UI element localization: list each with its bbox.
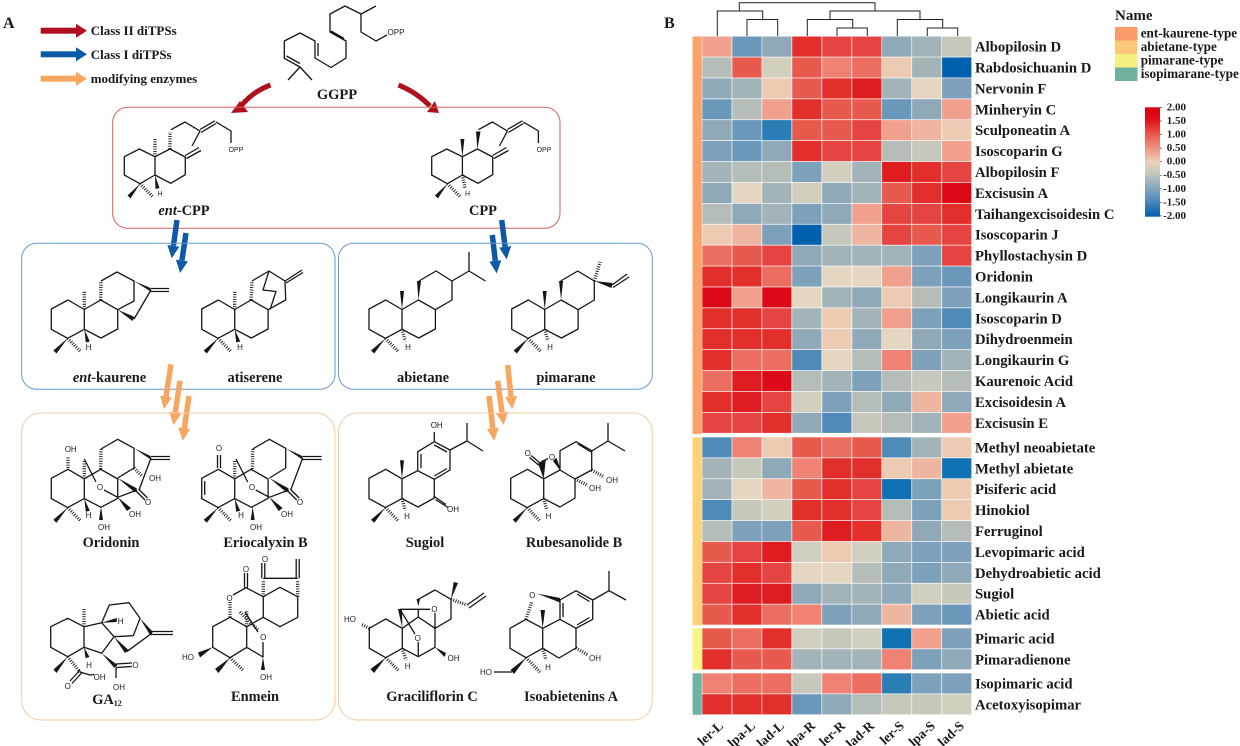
- panel: abietane/pimarane-derived products box: [338, 413, 652, 720]
- row labels: compound names: Dihydroenmein: [975, 332, 1073, 348]
- colour scale legend: -0.50: [1163, 169, 1186, 181]
- row labels: compound names: Phyllostachysin D: [975, 249, 1087, 265]
- panel letter A: A: [3, 15, 15, 32]
- molecule: Graciliflorin C: O: [431, 605, 438, 614]
- molecule: Oridonin: Oridonin: [83, 535, 139, 551]
- arrow: Class I diTPSs: Class I diTPSs: [91, 47, 172, 62]
- molecule: Eriocalyxin B: Eriocalyxin B: [223, 535, 308, 551]
- molecule: ent-CPP: OPP: [229, 147, 244, 154]
- molecule: Enmein: [182, 555, 299, 705]
- panel letter B: B: [664, 15, 675, 32]
- row labels: compound names: Methyl abietate: [975, 461, 1074, 477]
- molecule: Isoabietenins A: Isoabietenins A: [524, 689, 619, 705]
- molecule: Enmein: O: [226, 594, 233, 603]
- molecule: GA12: H: [118, 617, 124, 626]
- molecule: Rubesanolide B: [511, 423, 625, 551]
- colour scale legend: 1.50: [1167, 115, 1186, 127]
- row labels: compound names: Dehydroabietic acid: [975, 566, 1101, 582]
- legend: compound type: [1115, 8, 1239, 81]
- row labels: compound names: Sugiol: [975, 587, 1014, 603]
- molecule: Enmein: OH: [260, 673, 272, 682]
- molecule: Rubesanolide B: Rubesanolide B: [526, 535, 623, 551]
- row labels: compound names: Isoscoparin J: [975, 228, 1059, 244]
- molecule: Eriocalyxin B: H: [238, 511, 244, 520]
- molecule: Graciliflorin C: HO: [344, 615, 356, 624]
- molecule: Isoabietenins A: H: [545, 663, 551, 672]
- molecule: CPP: [432, 121, 552, 219]
- arrows: to oridonin-type products: [166, 364, 189, 428]
- molecule: GA12: OH: [113, 683, 125, 692]
- annotation bar: compound types: [692, 36, 702, 715]
- molecule: Graciliflorin C: OH: [448, 654, 460, 663]
- heatmap cells: pimarane-type: [702, 628, 971, 669]
- panel: abietane and pimarane box: [338, 243, 652, 389]
- molecule: Eriocalyxin B: O: [216, 444, 222, 453]
- molecule: CPP: OPP: [537, 147, 552, 154]
- colour scale legend: 0.00: [1167, 156, 1186, 168]
- molecule: GA12: GA: [92, 692, 114, 708]
- colour scale legend: -1.00: [1163, 183, 1186, 195]
- molecule: Graciliflorin C: [344, 582, 486, 705]
- row labels: compound names: Pimaradienone: [975, 652, 1071, 668]
- molecule: ent-kaurene: [51, 272, 169, 386]
- colour scale legend: [1145, 102, 1186, 222]
- molecule: Oridonin: OH: [129, 510, 141, 519]
- legend: compound type: ent-kaurene-type: [1141, 26, 1237, 40]
- legend: enzyme arrows: [41, 23, 197, 86]
- molecule: GGPP: GGPP: [317, 87, 357, 103]
- molecule: Sugiol: [369, 421, 483, 551]
- arrow: Class II diTPSs: [41, 23, 177, 38]
- legend: compound type: abietane-type: [1141, 39, 1217, 54]
- molecule: GA12: OH: [94, 673, 106, 682]
- molecule: Oridonin: OH: [98, 523, 110, 532]
- row labels: compound names: Nervonin F: [975, 81, 1046, 97]
- molecule: Oridonin: OH: [149, 474, 161, 483]
- row labels: compound names: Rabdosichuanin D: [975, 60, 1091, 76]
- row labels: compound names: Oridonin: [975, 270, 1033, 286]
- molecule: ent-CPP: [124, 121, 244, 219]
- row labels: compound names: Albopilosin F: [975, 165, 1060, 181]
- legend: compound type: pimarane-type: [1141, 52, 1224, 68]
- arrow: GGPP to CPP: [398, 85, 439, 113]
- molecule: Oridonin: H: [86, 511, 92, 520]
- colour scale legend: -1.50: [1163, 196, 1186, 208]
- row labels: compound names: Methyl neoabietate: [975, 440, 1096, 456]
- arrow: Class I diTPSs: [41, 47, 172, 62]
- panel: ent-kaurene and atiserene box: [22, 243, 335, 389]
- row labels: compound names: Pimaric acid: [975, 631, 1055, 647]
- molecule: ent-CPP: H: [157, 191, 163, 198]
- legend: compound type: isopimarane-type: [1141, 66, 1239, 81]
- row labels: compound names: Isoscoparin G: [975, 144, 1063, 160]
- molecule: GA12: [51, 603, 173, 708]
- row labels: compound names: Longikaurin A: [975, 290, 1068, 306]
- molecule: CPP: CPP: [469, 203, 497, 219]
- molecule: atiserene: atiserene: [228, 370, 283, 386]
- molecule: GA12: 12: [114, 699, 122, 708]
- molecule: atiserene: H: [237, 343, 243, 352]
- molecule: GGPP: OPP: [388, 28, 404, 37]
- arrows: CPP to ent-kaurene and atiserene: [173, 220, 186, 260]
- molecule: pimarane: [512, 262, 629, 386]
- row labels: compound names: Albopilosin D: [975, 40, 1061, 56]
- molecule: pimarane: pimarane: [536, 370, 596, 386]
- molecule: Graciliflorin C: O: [415, 634, 421, 643]
- molecule: ent-CPP: ent-CPP: [158, 203, 210, 219]
- molecule: Eriocalyxin B: O: [249, 483, 255, 492]
- legend: compound type: Name: [1115, 8, 1153, 24]
- molecule: Rubesanolide B: O: [525, 449, 531, 458]
- molecule: Rubesanolide B: OH: [606, 476, 618, 485]
- molecule: Sugiol: OH: [447, 505, 459, 514]
- molecule: Isoabietenins A: OH: [589, 654, 601, 663]
- molecule: pimarane: H: [547, 343, 553, 352]
- arrows: to sugiol-type products: [489, 365, 511, 428]
- molecule: abietane: [369, 252, 486, 386]
- row labels: compound names: [975, 40, 1114, 713]
- molecule: Isoabietenins A: [480, 571, 626, 705]
- molecule: Isoabietenins A: O: [529, 591, 535, 600]
- row labels: compound names: Pisiferic acid: [975, 482, 1056, 498]
- molecule: Eriocalyxin B: O: [297, 498, 303, 507]
- arrow: modifying enzymes: [41, 71, 197, 86]
- molecule: GA12: O: [65, 682, 71, 691]
- molecule: Enmein: O: [262, 555, 268, 564]
- row labels: compound names: Acetoxyisopimar: [975, 697, 1082, 713]
- molecule: abietane: H: [405, 343, 411, 352]
- molecule: Rubesanolide B: O: [549, 453, 555, 462]
- heatmap cells: abietane-type: [702, 437, 971, 625]
- panel: CPP box: [113, 107, 560, 228]
- row labels: compound names: Levopimaric acid: [975, 545, 1085, 561]
- row labels: compound names: Abietic acid: [975, 608, 1050, 624]
- row labels: compound names: Longikaurin G: [975, 353, 1070, 369]
- row labels: compound names: Isoscoparin D: [975, 311, 1062, 327]
- colour scale legend: -2.00: [1163, 210, 1186, 222]
- row labels: compound names: Taihangexcisoidesin C: [975, 207, 1114, 223]
- column labels: samples: [695, 718, 967, 746]
- molecule: Sugiol: Sugiol: [406, 535, 444, 551]
- row labels: compound names: Minheryin C: [975, 102, 1056, 118]
- molecule: Graciliflorin C: H: [405, 662, 411, 671]
- molecule: Sugiol: OH: [431, 421, 443, 430]
- molecule: CPP: H: [465, 191, 470, 198]
- panel B: metabolite heatmap: [664, 3, 1239, 746]
- arrows: CPP to abietane and pimarane: [492, 220, 505, 261]
- molecule: Enmein: O: [243, 565, 249, 574]
- molecule: Eriocalyxin B: [202, 439, 322, 551]
- molecule: GA12: O: [132, 661, 139, 670]
- dendrogram: [717, 3, 958, 36]
- colour scale legend: 2.00: [1167, 102, 1186, 114]
- molecule: Oridonin: O: [145, 498, 151, 507]
- row labels: compound names: Kaurenoic Acid: [975, 374, 1073, 390]
- molecule: Oridonin: O: [97, 483, 103, 492]
- row labels: compound names: Sculponeatin A: [975, 123, 1070, 139]
- row labels: compound names: Hinokiol: [975, 503, 1030, 519]
- row labels: compound names: Excisusin A: [975, 186, 1048, 202]
- arrow: GGPP to ent-CPP: [231, 85, 270, 113]
- colour scale legend: 1.00: [1167, 129, 1186, 141]
- molecule: ent-kaurene: ent-kaurene: [73, 370, 147, 386]
- molecule: Enmein: O: [260, 633, 266, 642]
- molecule: Isoabietenins A: HO: [480, 668, 492, 677]
- molecule: Oridonin: [51, 439, 170, 551]
- molecule: abietane: abietane: [397, 370, 450, 386]
- molecule: Eriocalyxin B: OH: [281, 510, 293, 519]
- molecule: atiserene: [202, 270, 303, 386]
- row labels: compound names: Ferruginol: [975, 524, 1043, 540]
- colour scale legend: 0.50: [1167, 142, 1186, 154]
- arrow: modifying enzymes: modifying enzymes: [91, 71, 197, 86]
- molecule: Graciliflorin C: Graciliflorin C: [386, 689, 478, 705]
- molecule: Rubesanolide B: OH: [589, 484, 601, 493]
- molecule: Oridonin: OH: [65, 445, 77, 454]
- molecule: Eriocalyxin B: OH: [250, 523, 262, 532]
- panel: kaurene-derived products box: [22, 413, 335, 720]
- molecule: ent-kaurene: H: [86, 343, 92, 352]
- molecule: GGPP: [284, 6, 404, 103]
- row labels: compound names: Excisusin E: [975, 416, 1048, 432]
- arrow: Class II diTPSs: Class II diTPSs: [91, 23, 177, 38]
- panel A: biosynthesis pathway: [3, 6, 652, 720]
- molecule: Rubesanolide B: H: [546, 512, 552, 521]
- row labels: compound names: Excisoidesin A: [975, 395, 1066, 411]
- row labels: compound names: Isopimaric acid: [975, 676, 1073, 692]
- molecule: Enmein: HO: [182, 653, 194, 662]
- molecule: GA12: H: [86, 661, 92, 670]
- heatmap cells: isopimarane-type: [702, 673, 971, 714]
- molecule: Sugiol: H: [404, 512, 410, 521]
- molecule: Enmein: Enmein: [231, 689, 279, 705]
- heatmap cells: ent-kaurene-type: [702, 36, 971, 433]
